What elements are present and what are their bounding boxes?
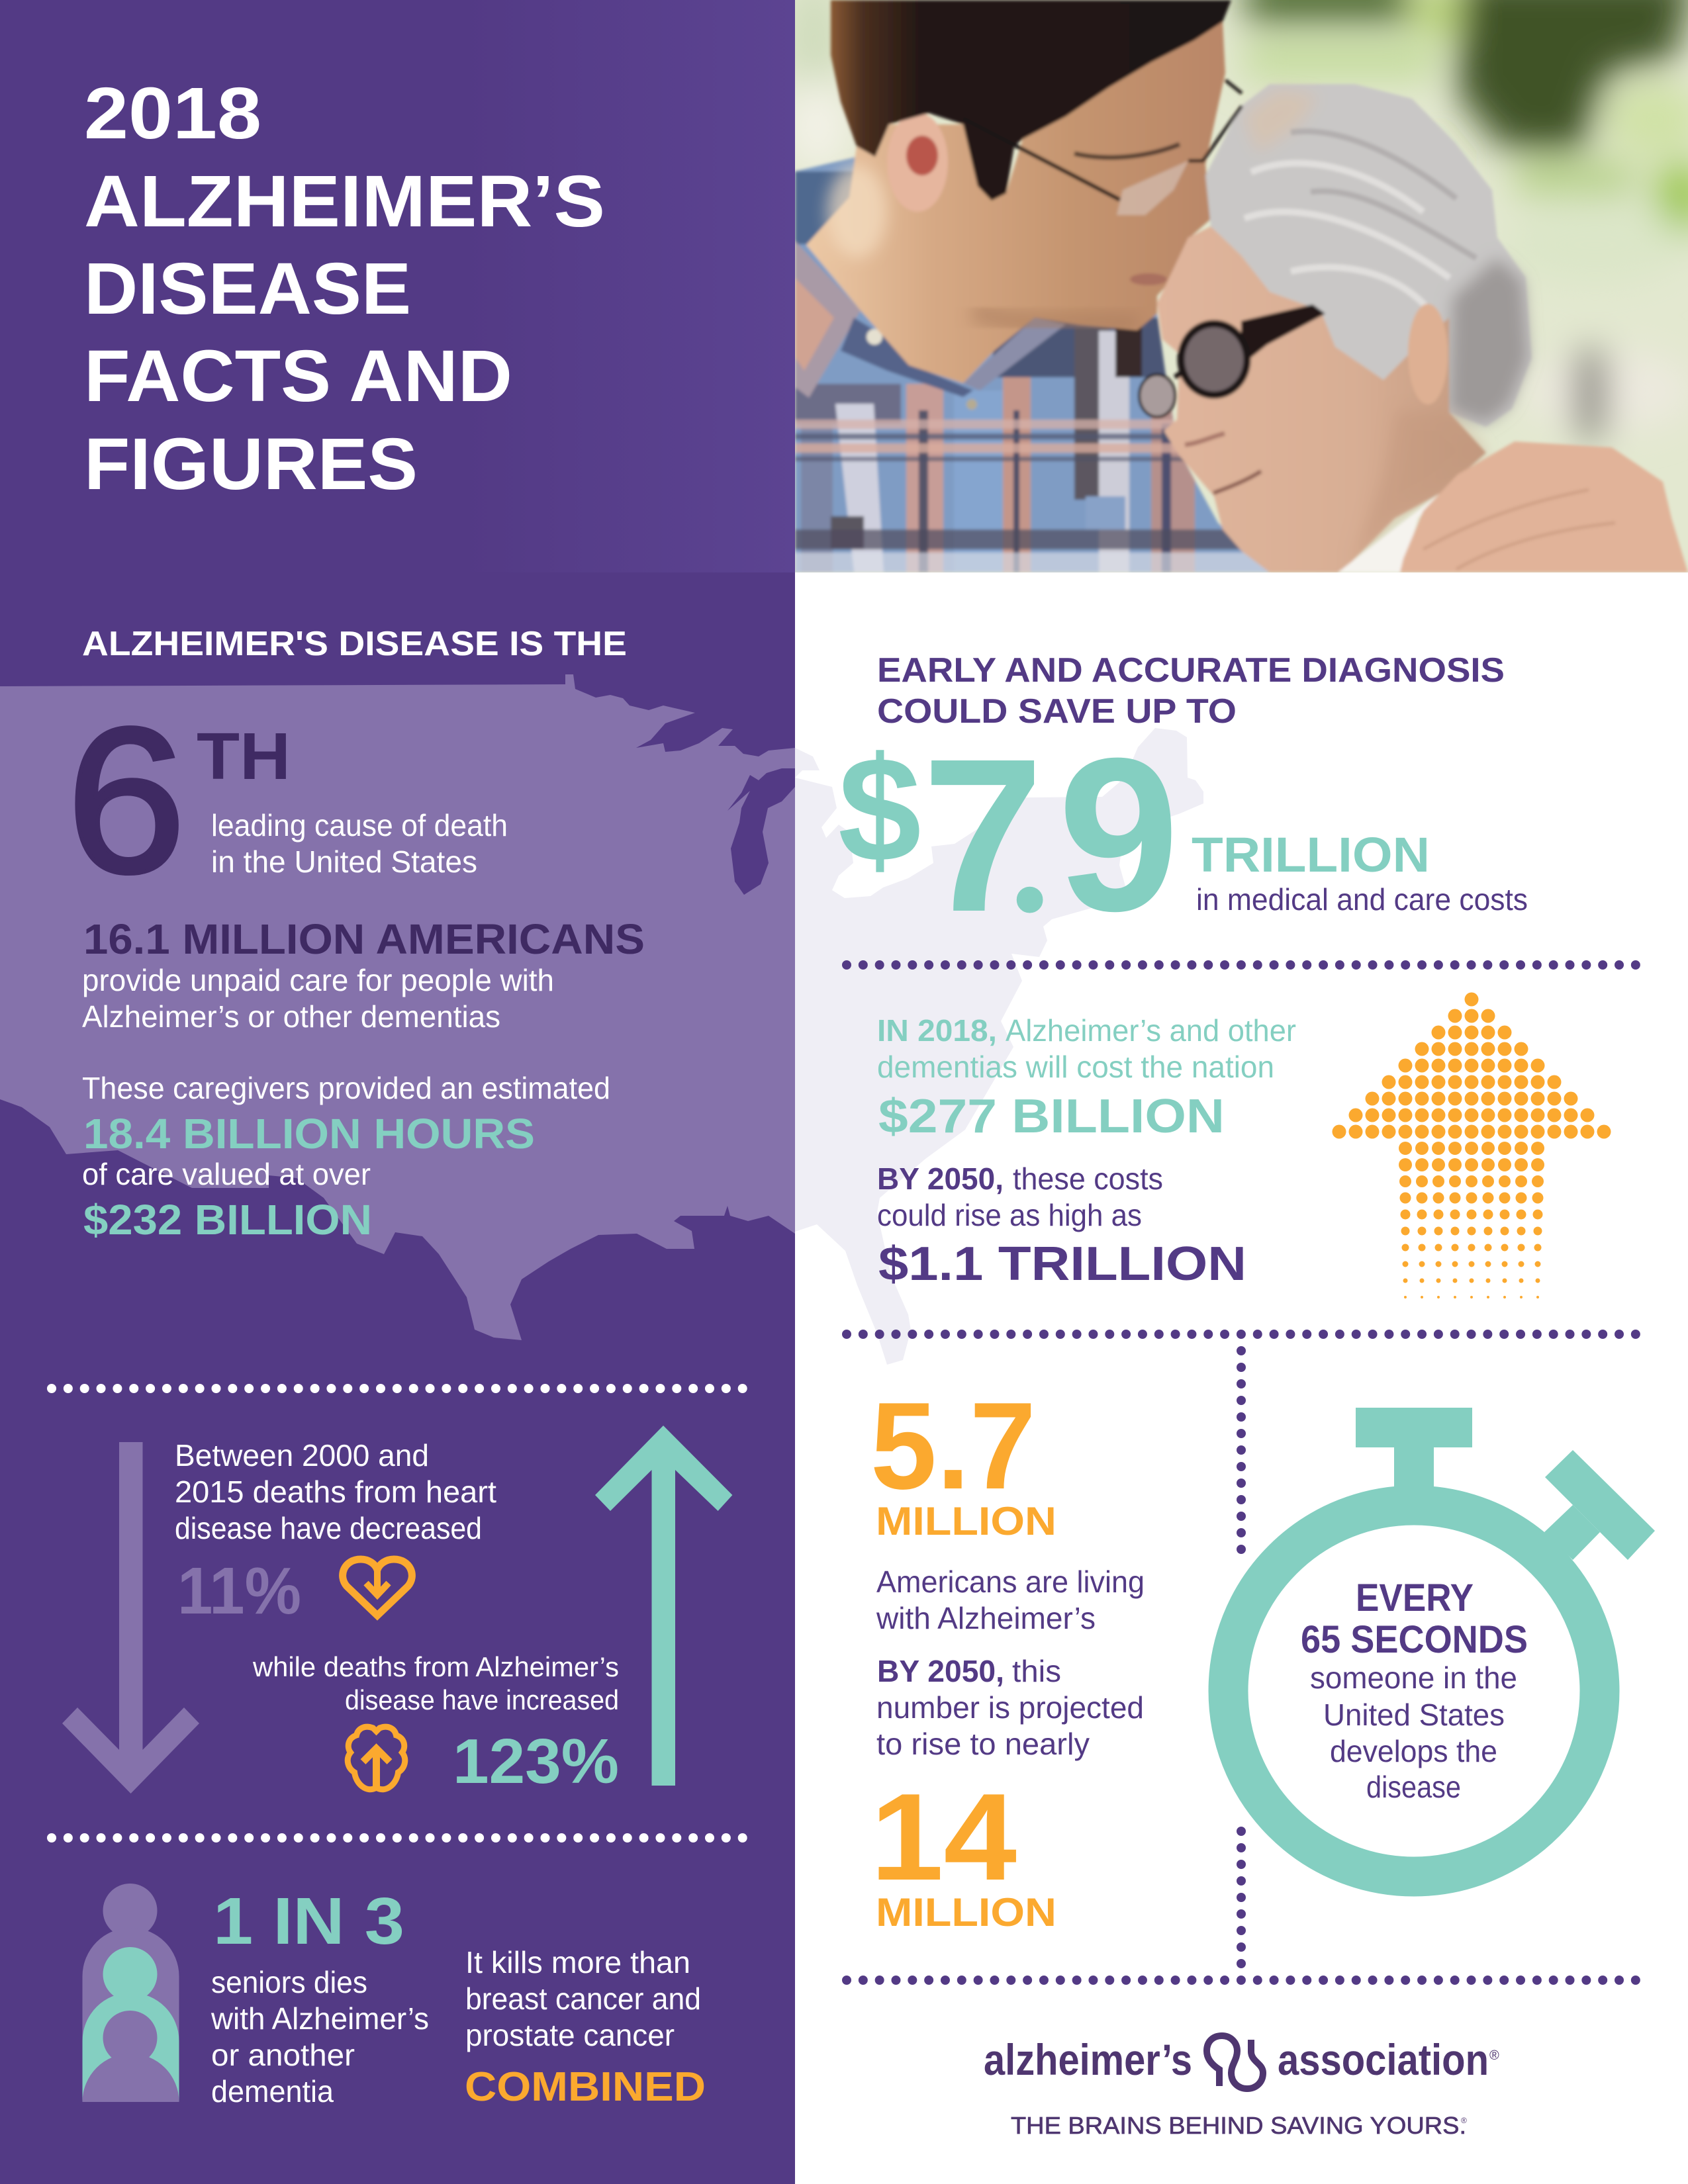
text: 2050 cost: BY 2050, [877,1161,1004,1196]
stat: 18.4 billion hours: These caregivers provided an estimated [82,1071,610,1105]
text: seniors dies [211,1965,429,2109]
text: kills more than cancers combined: prostate cancer [465,2018,675,2052]
text: by 2050 projection: to rise to nearly [876,1727,1090,1761]
title: 2018 [84,73,261,154]
woman's mouth [1213,471,1261,493]
text: 2018 cost [877,1013,1296,1143]
text: by 2050 projection: number is projected [876,1690,1144,1725]
map: eastern United States on white side [795,728,1203,1365]
title: ALZHEIMER’S [84,161,605,242]
text: heart disease deaths decreased: disease have decreased [175,1511,482,1545]
panel: left purple column [0,0,795,2184]
stat: $7.9 trillion: 9 [1058,712,1180,956]
logo: Alzheimer's Association [984,2035,1499,2089]
text: seniors dies: or another [211,2038,355,2072]
arrow: up [595,1426,732,1786]
stat: 16.1 million Americans [82,915,645,1034]
stat: 5.7 million [870,1377,1145,1635]
text: 2018 cost: Alzheimer’s and other [1006,1013,1296,1048]
text: every 65 seconds [1301,1576,1528,1804]
lake michigan [727,768,795,895]
text: 2050 cost: could rise as high as [877,1198,1142,1232]
icon: three people [82,1884,179,2102]
text: every 65 seconds: 65 SECONDS [1301,1618,1528,1661]
heading: early and accurate diagnosis: EARLY AND ACCURATE DIAGNOSIS [877,651,1505,690]
stat: 18.4 billion hours: 18.4 BILLION HOURS [83,1110,535,1158]
text: heart disease deaths decreased [175,1438,496,1545]
text: every 65 seconds: develops the [1330,1734,1497,1768]
stat: 5.7 million: MILLION [876,1499,1056,1543]
caption: leading cause of death [211,808,508,842]
text: kills more than cancers combined [465,1945,706,2110]
shirt collar right [841,318,973,397]
buttons [867,329,882,345]
logo: Alzheimer's Association: ® [1489,2048,1499,2063]
stat: 14 million [870,1768,1056,1934]
title: FACTS AND [84,336,512,417]
caption: in the United States [211,844,477,879]
text: every 65 seconds: disease [1366,1770,1461,1804]
man's neck highlight [827,165,887,258]
heading: early and accurate diagnosis [877,651,1505,731]
text: by 2050 projection: BY 2050, [877,1654,1004,1688]
woman's nose shadow [1185,433,1225,445]
th suffix: TH [197,719,291,794]
man's glasses [963,118,1120,200]
number 6: 6 [66,686,186,916]
map: United States silhouette on purple panel [0,674,795,1340]
text: 2018 cost: dementias will cost the nation [877,1050,1274,1084]
photo: man kissing elderly woman [784,0,1688,576]
stat: 16.1 million Americans: 16.1 MILLION AMERICANS [83,915,645,963]
caption [211,808,508,879]
stat: $7.9 trillion [838,712,1528,957]
stat: 5.7 million: with Alzheimer’s [876,1601,1096,1635]
arrow: down [62,1442,199,1794]
logo: Alzheimer's Association: alzheimer’s [984,2035,1192,2084]
man's eyebrow [1074,144,1180,158]
stat: $7.9 trillion: 7 [922,713,1044,957]
text: Alzheimer's deaths increased: disease have increased [345,1684,619,1715]
icon: stopwatch [1229,1408,1655,1877]
text: 2050 cost: $1.1 TRILLION [878,1238,1246,1291]
title [84,73,605,505]
stat: 5.7 million: 5.7 [870,1377,1036,1515]
text: every 65 seconds: someone in the [1310,1661,1517,1695]
text: 2018 cost: $277 BILLION [878,1090,1225,1143]
icon: brain with up arrow [348,1727,405,1790]
text: 2018 cost: IN 2018, [877,1013,997,1048]
stat: $7.9 trillion: . [1009,766,1050,946]
stat: 16.1 million Americans: Alzheimer’s or other dementias [82,999,500,1034]
text: seniors dies: dementia [211,2074,334,2109]
woman's hair bun [1449,258,1528,424]
icon: heart with down arrow [343,1559,412,1615]
stat: 14 million: MILLION [876,1890,1056,1934]
icon: dotted up arrow [1339,999,1605,1297]
tagline: ® [1461,2116,1467,2125]
woman's glasses [1241,304,1325,365]
text: by 2050 projection: this [1012,1654,1061,1688]
stat: 6th leading cause [66,686,508,916]
text: heart disease deaths decreased: 2015 deaths from heart [175,1475,496,1509]
stat: 5.7 million: Americans are living [876,1565,1145,1599]
text: every 65 seconds: EVERY [1356,1576,1474,1619]
stat: 14 million: 14 [870,1768,1017,1906]
stat: 11%: 11% [177,1554,301,1628]
logo: Alzheimer's Association: association [1278,2035,1489,2084]
shirt [795,156,1268,572]
text: kills more than cancers combined: It kills more than [465,1945,690,1979]
text: heart disease deaths decreased: Between 2000 and [175,1438,429,1473]
stat: 18.4 billion hours: of care valued at over [82,1157,371,1191]
stat: $7.9 trillion: in medical and care costs [1196,882,1528,917]
text: Alzheimer's deaths increased [252,1651,619,1715]
text: Alzheimer's deaths increased: while deaths from Alzheimer’s [252,1651,619,1682]
title: DISEASE [84,248,411,330]
logo mark [1207,2036,1263,2089]
text: 2050 cost: these costs [1013,1161,1163,1196]
panel photo overlay tint [463,0,795,572]
woman's ear [1408,304,1448,404]
woman's face [1157,226,1486,572]
heading: early and accurate diagnosis: COULD SAVE UP TO [877,692,1237,731]
heading: Alzheimer's disease is the: ALZHEIMER'S DISEASE IS THE [82,625,627,663]
text: kills more than cancers combined: COMBINED [465,2064,706,2110]
man's ear [887,113,948,212]
text: by 2050 projection [876,1654,1144,1761]
stat: 123%: 123% [453,1726,619,1797]
text: seniors dies: with Alzheimer’s [211,2001,429,2036]
man's jaw shadow [973,311,1139,324]
white collar [1338,493,1440,572]
shirt collar left [795,241,861,398]
stat: $7.9 trillion: TRILLION [1192,827,1430,882]
stat: 1 in 3: 1 IN 3 [213,1884,404,1958]
woman's hair [1205,84,1532,427]
text: seniors dies: seniors dies [211,1965,367,1999]
title: FIGURES [84,424,418,505]
stat: 16.1 million Americans: provide unpaid care for people with [82,963,554,997]
man's lips [1130,273,1167,285]
text: 2050 cost [877,1161,1246,1291]
woman's neck shadow [1350,410,1486,569]
stat: 18.4 billion hours [82,1071,610,1244]
stat: 18.4 billion hours: $232 BILLION [83,1196,372,1244]
man's hand [1400,441,1688,572]
stat: $7.9 trillion: $ [838,725,921,893]
tagline: THE BRAINS BEHIND SAVING YOURS. [1011,2112,1466,2139]
man's hair [831,0,1231,201]
text: kills more than cancers combined: breast cancer and [465,1981,701,2016]
man's skin [806,22,1225,383]
text: every 65 seconds: United States [1323,1698,1505,1732]
